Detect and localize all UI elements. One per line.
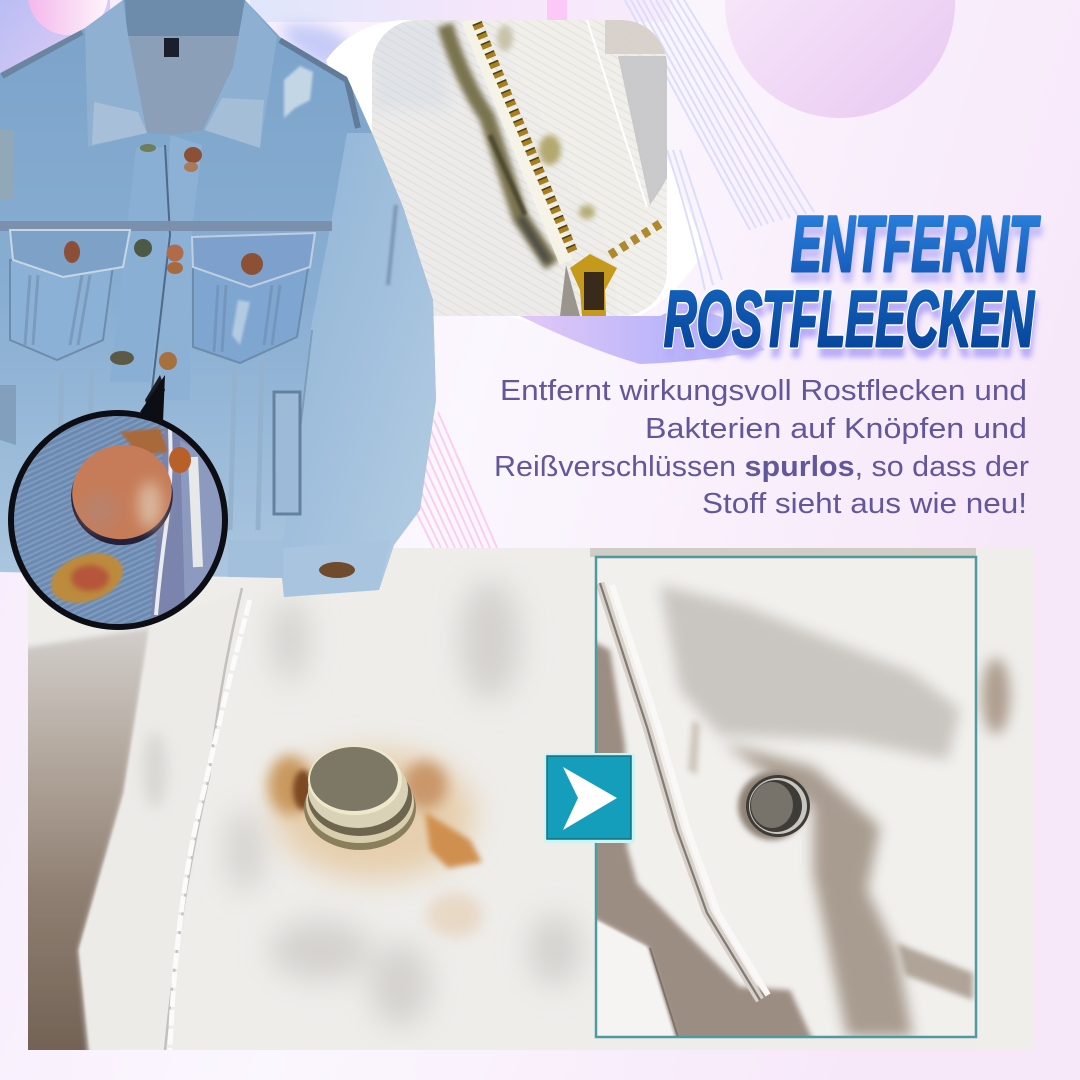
sleeve bbox=[282, 133, 436, 597]
left chest pocket bbox=[10, 230, 130, 360]
arrow button bbox=[544, 753, 635, 843]
metal button after bbox=[738, 772, 810, 840]
lower body bbox=[0, 385, 16, 445]
pointer bbox=[140, 375, 165, 422]
torn patch bbox=[284, 66, 313, 118]
body line 4: Stoff sieht aus wie neu! bbox=[702, 488, 1027, 520]
right chest pocket bbox=[192, 233, 315, 363]
rust stain bbox=[268, 750, 483, 937]
photo: stained white fabric bbox=[10, 548, 1034, 1070]
right collar bbox=[203, 0, 277, 148]
shoulder seams bbox=[2, 32, 82, 76]
decorative bubbles and waves bbox=[0, 0, 955, 548]
body line 1: Entfernt wirkungsvoll Rostflecken und bbox=[500, 375, 1027, 407]
panel: zipper photo bbox=[372, 20, 667, 316]
title bbox=[664, 199, 1042, 373]
left collar bbox=[85, 0, 147, 147]
panel: before and after photo bbox=[10, 548, 1034, 1070]
placket bbox=[110, 372, 151, 382]
body line 3: Reißverschlüssen spurlos, so dass der bbox=[494, 451, 1030, 483]
jacket buttons bbox=[64, 144, 355, 578]
metal button before bbox=[304, 745, 416, 850]
panel: after photo bbox=[590, 557, 976, 1045]
body text bbox=[494, 375, 1030, 520]
photo: denim jacket bbox=[0, 0, 436, 597]
left side tear bbox=[0, 130, 14, 200]
body line 2: Bakterien auf Knöpfen und bbox=[645, 413, 1027, 445]
neck lining bbox=[128, 36, 238, 135]
magnifier callout bbox=[8, 375, 230, 630]
yoke bbox=[0, 221, 332, 231]
